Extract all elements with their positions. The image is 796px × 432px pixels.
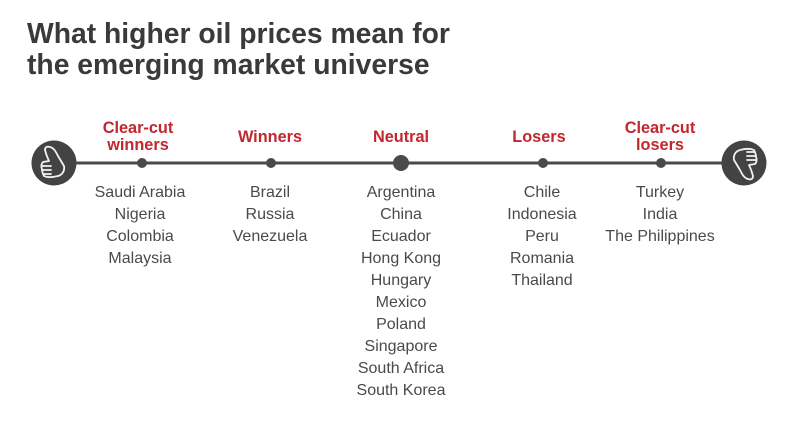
list: clear-cut winners: Colombia [106,228,174,245]
heading: neutral: Neutral [373,128,429,146]
list: neutral: South Korea [357,382,445,399]
list: neutral: Singapore [365,338,437,355]
list: winners: Brazil [250,184,290,201]
list: winners: Venezuela [233,228,307,245]
list: clear-cut losers: India [643,206,677,223]
list: losers [507,184,577,289]
title: the emerging market universe [27,48,430,80]
list: neutral: Hong Kong [361,250,441,267]
list: clear-cut winners [95,184,186,267]
list: neutral: South Africa [358,360,444,377]
list: clear-cut winners: Saudi Arabia [95,184,185,201]
list: clear-cut losers: The Philippines [605,228,715,245]
list: clear-cut winners: Malaysia [108,250,172,267]
list: clear-cut losers: Turkey [636,184,684,201]
heading: clear-cut winners: Clear-cut [103,119,173,137]
heading: clear-cut winners [103,119,174,154]
list: losers: Peru [525,228,559,245]
list: losers: Thailand [511,272,573,289]
heading: clear-cut losers: losers [636,136,684,154]
heading: clear-cut winners: winners [107,136,169,154]
list: neutral: Ecuador [371,228,431,245]
list: neutral: Mexico [376,294,426,311]
list: neutral: China [380,206,422,223]
title [27,17,450,80]
heading: clear-cut losers: Clear-cut [625,119,695,137]
list: neutral [357,184,446,399]
list: winners: Russia [246,206,294,223]
list: losers: Chile [524,184,560,201]
list: losers: Indonesia [507,206,577,223]
heading: clear-cut losers [625,119,696,154]
heading: winners: Winners [238,128,302,146]
list: clear-cut winners: Nigeria [115,206,165,223]
list: winners [232,184,308,245]
list: neutral: Argentina [367,184,435,201]
heading: losers: Losers [512,128,566,146]
title: What higher oil prices mean for [27,17,450,49]
list: neutral: Poland [376,316,426,333]
list: losers: Romania [510,250,574,267]
list: clear-cut losers [605,184,715,245]
list: neutral: Hungary [371,272,431,289]
